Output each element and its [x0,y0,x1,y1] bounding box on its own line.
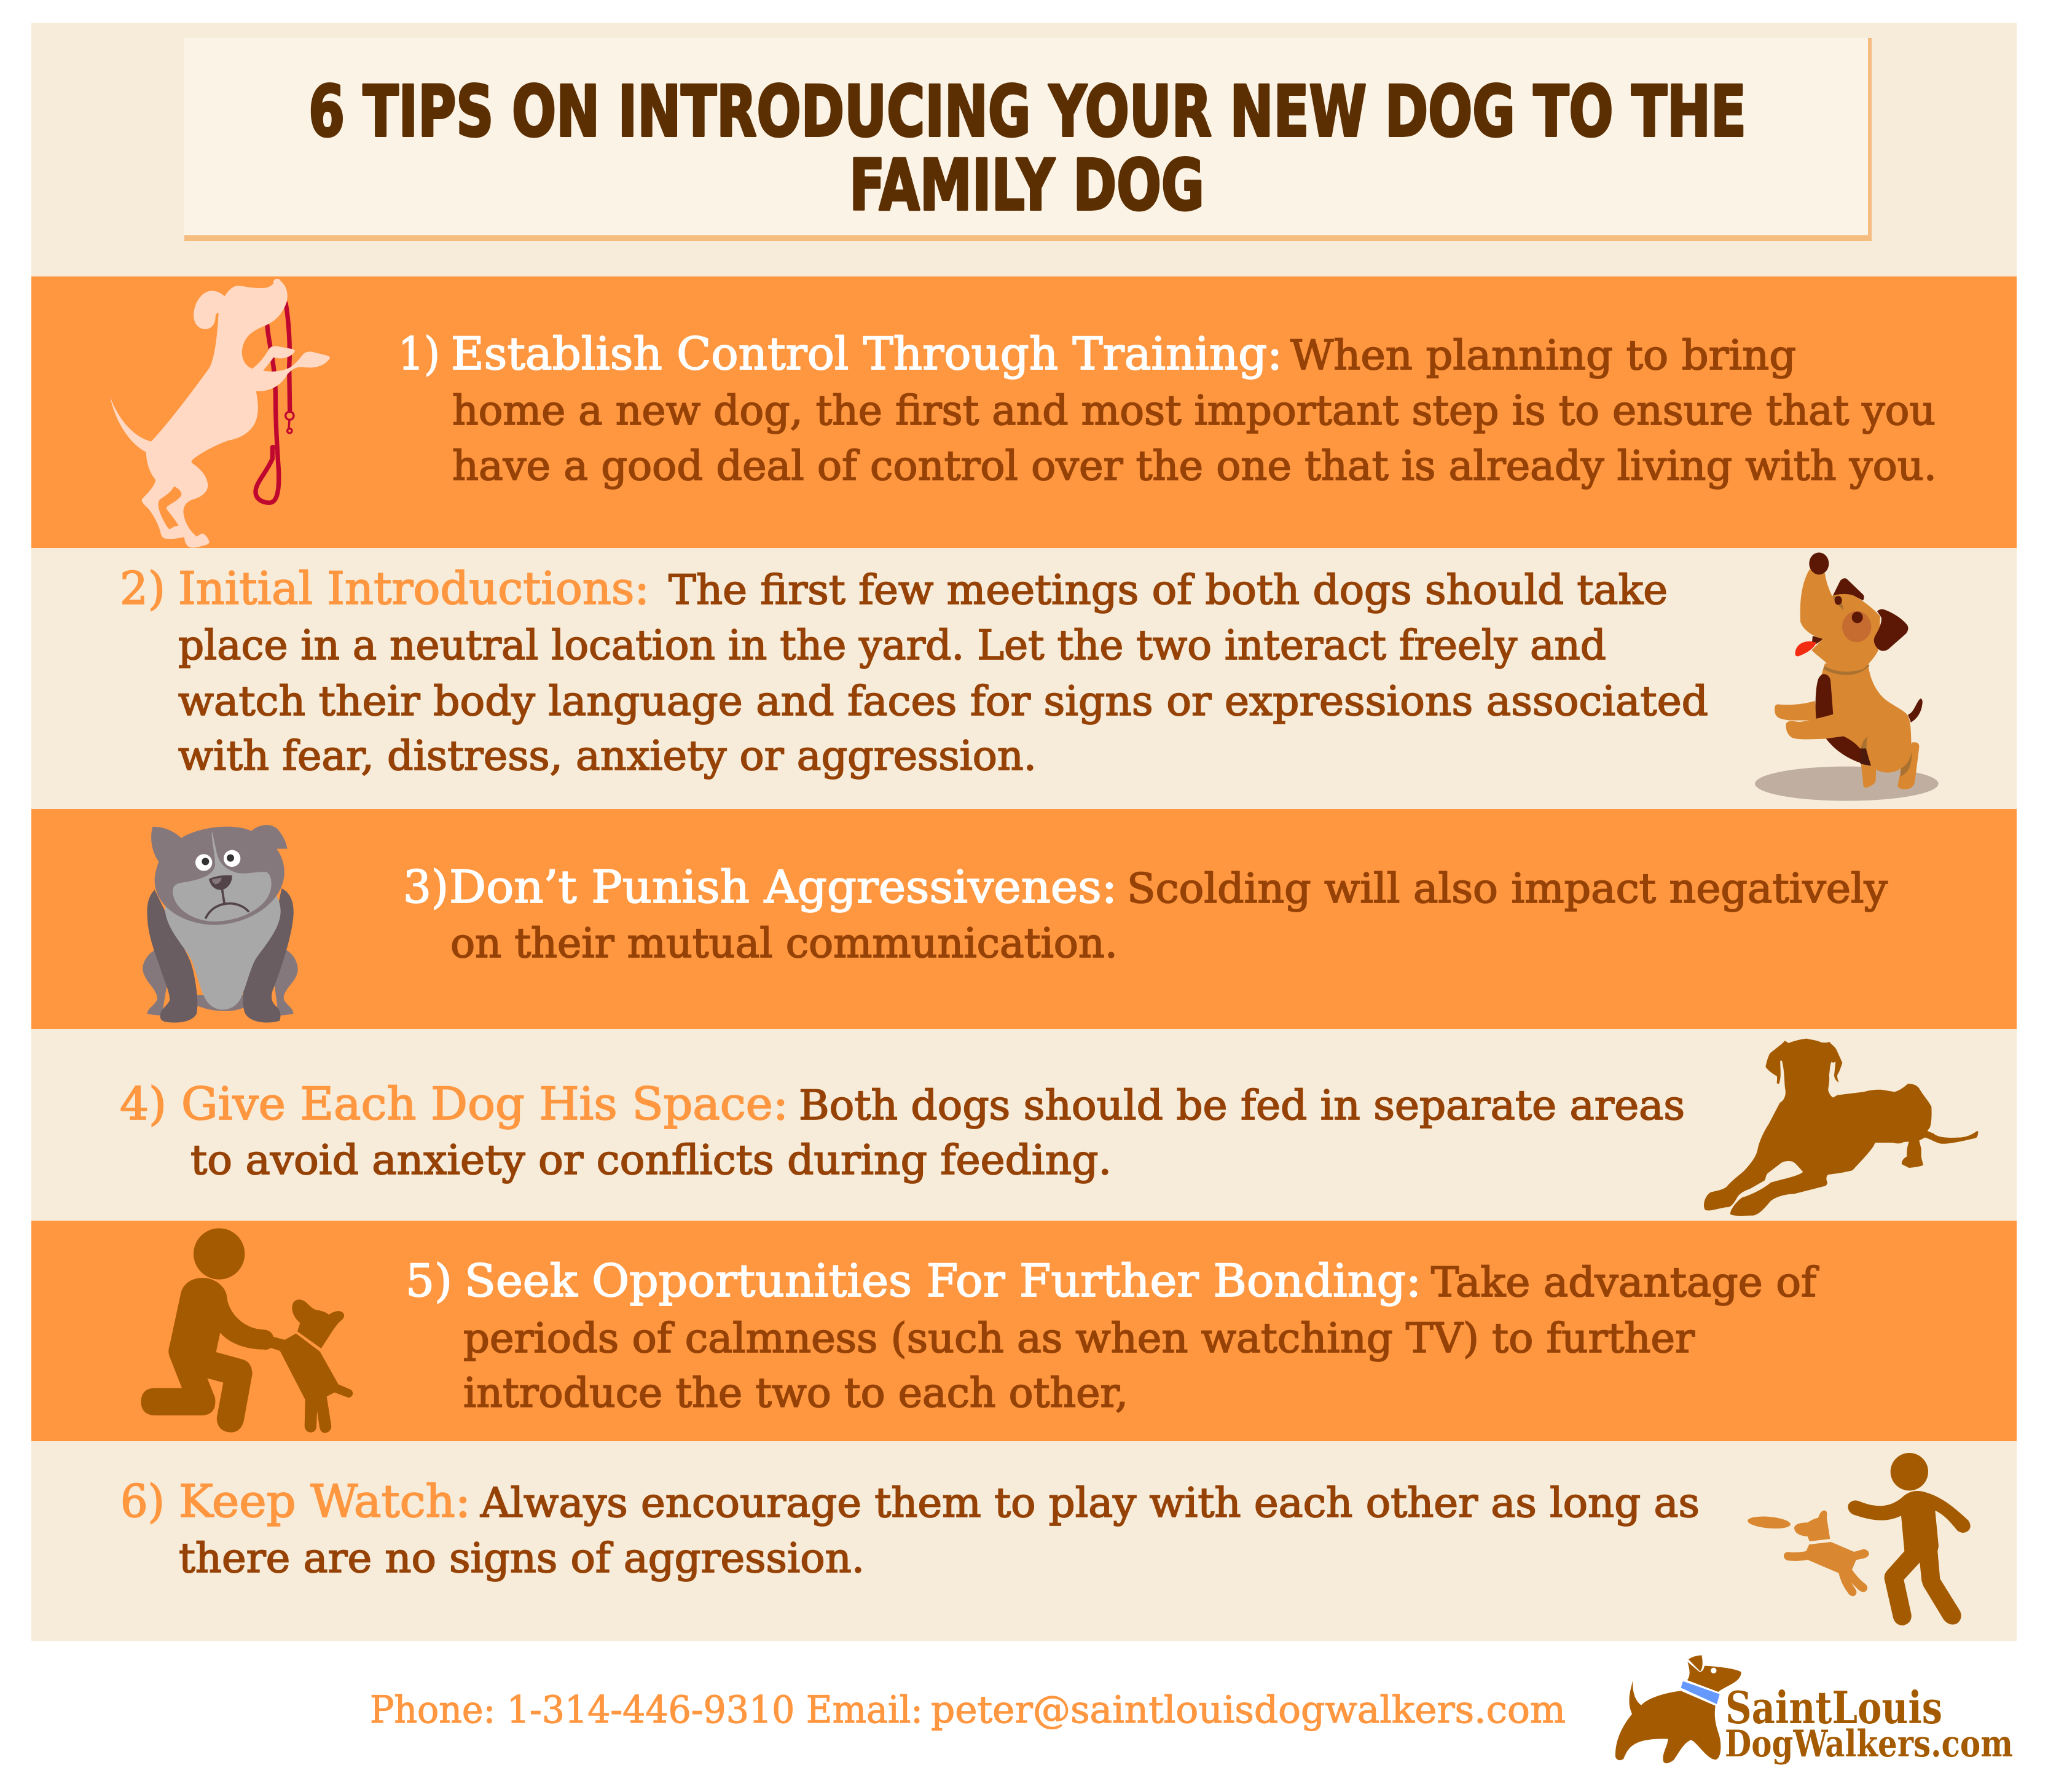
panel: tip 1 [31,276,2017,548]
tip 4 body text: Both dogs should be fed in separate areas [799,1082,1685,1129]
tip 1 body text [452,332,1937,490]
tip 3 body text: on their mutual communication. [450,920,1118,967]
icon: sad bulldog [143,825,298,1023]
tip 5 body text [463,1259,1819,1417]
title [308,71,1746,226]
icon: kneeling person with dog [141,1228,353,1433]
tip 4 heading: Give Each Dog His Space: [181,1078,788,1130]
tip 1 heading: 1) [398,328,440,380]
contact line [370,1688,1566,1732]
logo: Saint Louis Dog Walkers [1615,1655,2013,1766]
tip 3 body text [450,865,1888,967]
tip 3 body text: Scolding will also impact negatively [1127,865,1888,912]
tip 1 body text: When planning to bring [1290,332,1796,379]
title: FAMILY DOG [849,144,1204,226]
tip 4 body text: to avoid anxiety or conflicts during feeding. [190,1137,1112,1184]
panel: tip 6 [31,1441,2017,1641]
contact line: Phone: 1-314-446-9310 Email: [370,1688,923,1732]
logo wordmark: SaintLouis [1725,1681,1942,1734]
icon: jumping dog with leash [110,279,330,548]
logo wordmark [1725,1681,2013,1766]
icon: logo dog [1615,1655,1741,1763]
panel: tip 4 [31,1029,2017,1221]
tip 1 body text: have a good deal of control over the one that is already living with you. [452,442,1937,490]
tip 1 heading: Establish Control Through Training: [451,328,1282,380]
tip 5 heading: Seek Opportunities For Further Bonding: [465,1255,1421,1307]
tip 3 heading: Don’t Punish Aggressivenes: [449,861,1117,914]
contact line: peter@saintlouisdogwalkers.com [931,1688,1566,1732]
tip 5 body text: Take advantage of [1431,1259,1819,1306]
icon: lying dog silhouette [1704,1039,1978,1216]
panel: tip 2 [31,548,2017,809]
icon: puppy looking up [1755,552,1939,801]
tip 6 body text [179,1479,1700,1582]
tip 2 body text: The first few meetings of both dogs should take [669,566,1668,614]
icon: person throwing frisbee to dog [1747,1453,1971,1626]
tip 6 heading: Keep Watch: [179,1476,471,1528]
tip 5 body text: introduce the two to each other, [463,1369,1128,1417]
panel: tip 5 [31,1221,2017,1441]
tip 4 heading: 4) [120,1078,167,1130]
tip 5 heading: 5) [406,1255,452,1307]
tip 2 body text: watch their body language and faces for signs or expressions associated [178,678,1708,725]
tip 6 body text: Always encourage them to play with each other as long as [480,1479,1700,1527]
tip 5 body text: periods of calmness (such as when watching TV) to further [463,1315,1695,1362]
panel: tip 3 [31,809,2017,1029]
title box [184,38,1872,241]
tip 2 body text: place in a neutral location in the yard. Let the two interact freely and [178,622,1606,669]
tip 2 heading: Initial Introductions: [178,563,649,615]
tip 1 body text: home a new dog, the first and most important step is to ensure that you [452,387,1936,434]
tip 2 heading: 2) [120,563,165,615]
tip 2 body text [178,566,1708,780]
tip 3 heading: 3) [403,861,449,914]
tip 4 body text [190,1082,1685,1184]
tip 6 body text: there are no signs of aggression. [179,1535,865,1582]
panel: header [31,23,2017,276]
tip 6 heading: 6) [120,1476,165,1528]
tip 2 body text: with fear, distress, anxiety or aggression. [178,732,1037,780]
